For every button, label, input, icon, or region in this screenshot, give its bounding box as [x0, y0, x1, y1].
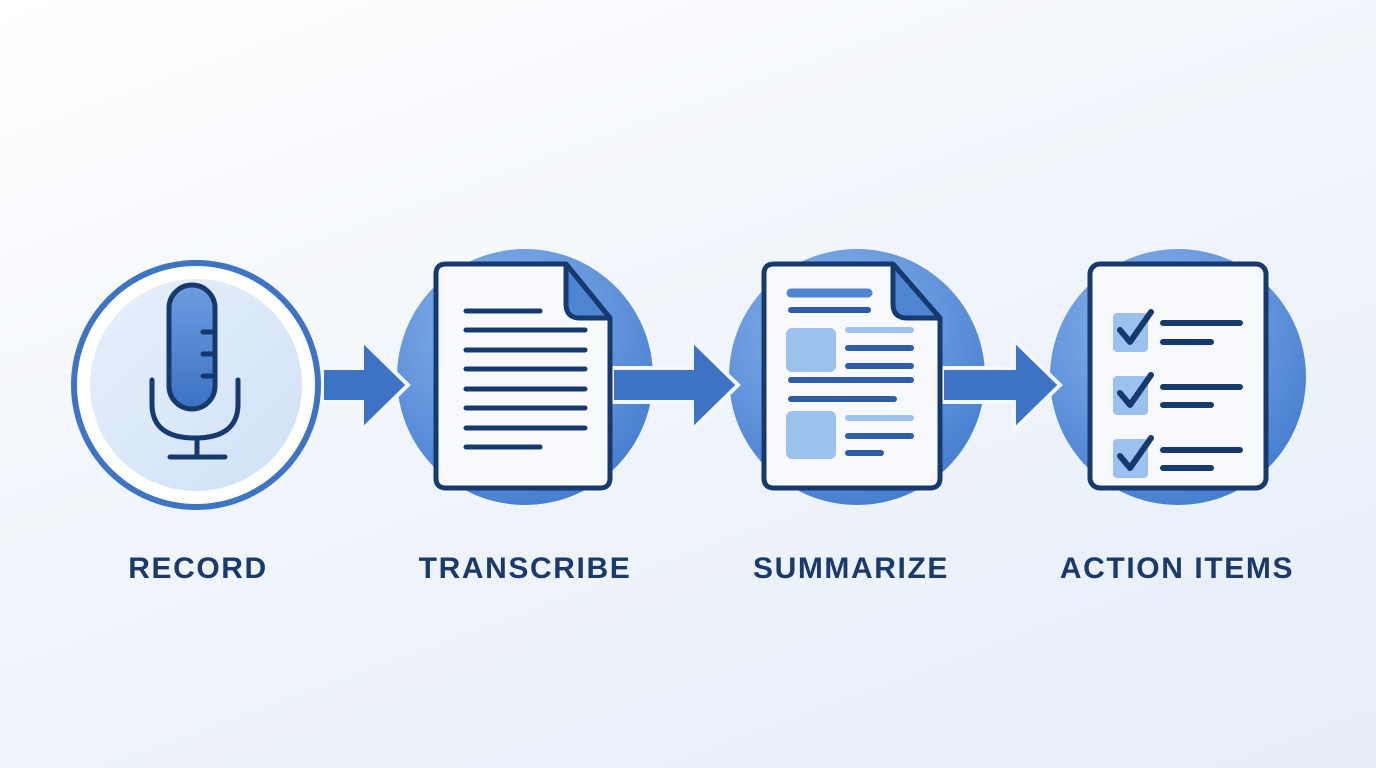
- step: action items: [1090, 264, 1266, 488]
- step: record: [74, 263, 318, 507]
- step: summarize: [764, 264, 940, 488]
- label: summarize: SUMMARIZE: [753, 552, 949, 585]
- icon: document transcript: [436, 264, 610, 488]
- step: transcribe: [436, 264, 610, 488]
- label: record: RECORD: [128, 552, 268, 585]
- arrow 1: [322, 340, 408, 430]
- icon: microphone: [152, 285, 238, 457]
- background circles: [397, 249, 1306, 505]
- icon: checklist: [1090, 264, 1266, 488]
- arrow 2: [612, 340, 738, 430]
- icon: summary document: [764, 264, 940, 488]
- arrow 3: [942, 340, 1060, 430]
- label: action items: ACTION ITEMS: [1060, 552, 1294, 585]
- label: transcribe: TRANSCRIBE: [419, 552, 631, 585]
